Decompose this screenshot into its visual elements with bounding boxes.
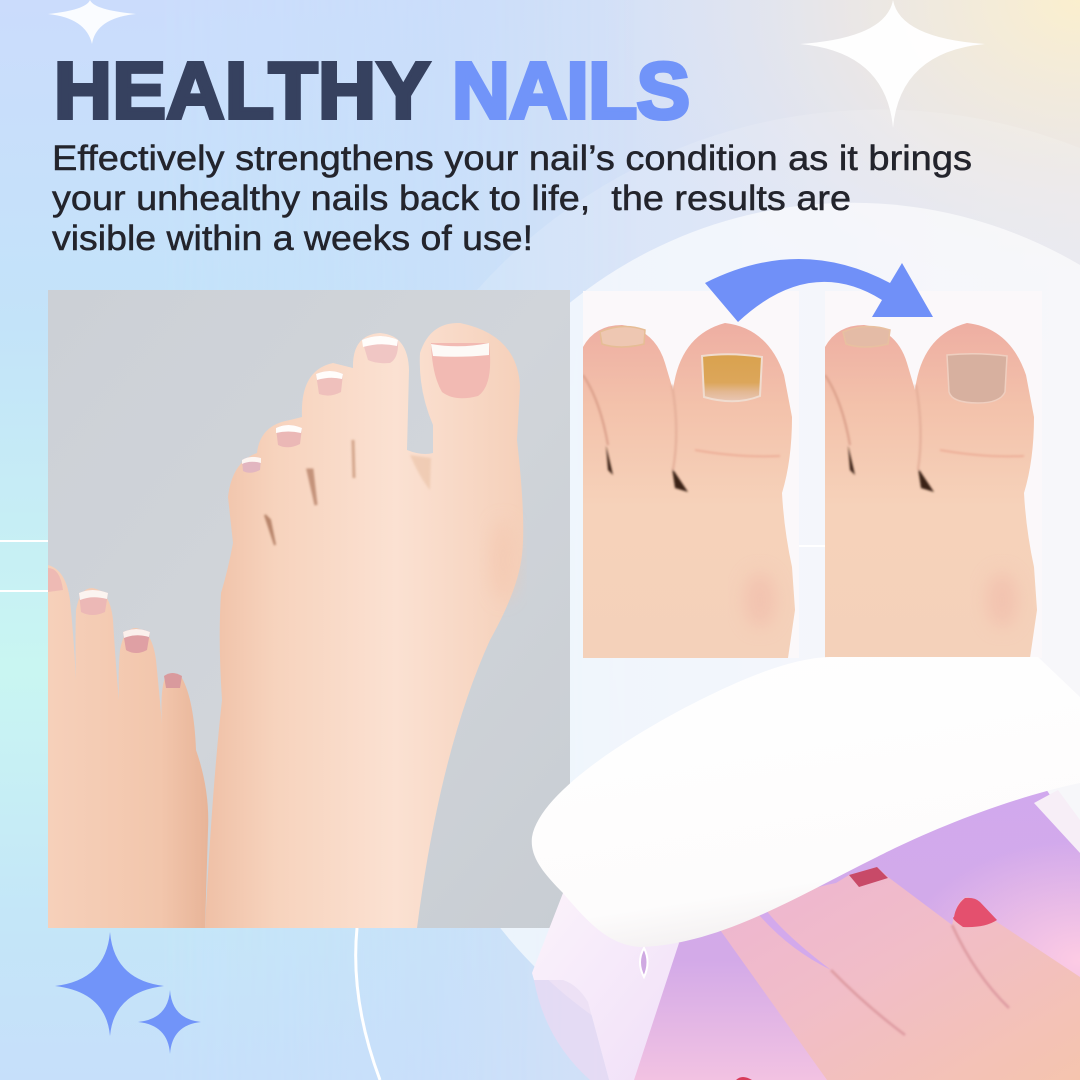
title: NAILS bbox=[452, 46, 690, 135]
lamp base bbox=[532, 893, 679, 1080]
icon: blue sparkle small bbox=[138, 990, 201, 1054]
icon: white sparkle top left bbox=[48, 0, 136, 44]
text block: description: visible within a weeks of use! bbox=[52, 219, 533, 258]
photo: after toes bbox=[825, 323, 1037, 658]
toe gap shadows bbox=[825, 375, 1024, 492]
nail: yellowed toenail bbox=[702, 354, 762, 401]
title bbox=[54, 46, 690, 135]
finger creases bbox=[831, 925, 1009, 1035]
hand bbox=[718, 867, 1080, 1080]
finger gap bbox=[760, 910, 831, 970]
lamp strut bbox=[1034, 790, 1080, 853]
lamp interior bbox=[634, 780, 1080, 1080]
title: HEALTHY bbox=[54, 46, 430, 135]
right foot bbox=[205, 323, 523, 928]
nail: healed toenail bbox=[947, 354, 1007, 403]
illustration: UV nail lamp with hand bbox=[532, 657, 1080, 1080]
nails: right foot bbox=[242, 336, 490, 473]
text block: description bbox=[52, 139, 972, 258]
photo: healthy feet bbox=[48, 290, 570, 928]
red nails bbox=[953, 898, 997, 927]
toe gap shadows bbox=[583, 375, 780, 492]
icon: blue sparkle large bbox=[55, 932, 164, 1036]
arrow: before to after bbox=[705, 259, 933, 322]
lamp cover bbox=[532, 657, 1080, 947]
nails: left foot bbox=[48, 568, 182, 688]
photo: before toes bbox=[583, 291, 799, 658]
text block: description: your unhealthy nails back to life, the results are bbox=[52, 179, 851, 218]
icon: white sparkle top right bbox=[800, 0, 985, 128]
left foot bbox=[48, 565, 208, 928]
text block: description: Effectively strengthens your nail’s condition as it brings bbox=[52, 139, 972, 178]
foot shading bbox=[265, 440, 431, 545]
